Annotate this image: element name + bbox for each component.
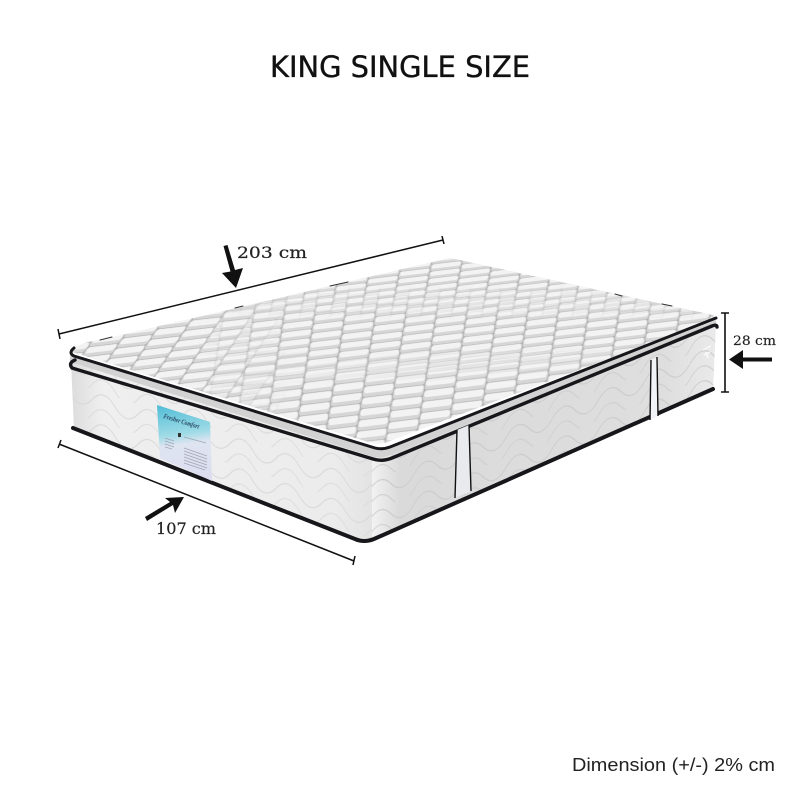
- back edge piping: [100, 282, 672, 340]
- arrow: length: [222, 245, 243, 288]
- dimension: length line: [58, 236, 444, 339]
- lower piping: [71, 325, 717, 460]
- label brand text: Fresher Comfort: [162, 412, 201, 431]
- bottom piping: [73, 389, 713, 541]
- height label: 28 cm: [733, 334, 776, 349]
- upper piping: [71, 318, 716, 449]
- width label: 107 cm: [156, 520, 216, 538]
- right side panel: [372, 325, 716, 541]
- front side panel: [71, 362, 378, 541]
- pillow top band: [70, 320, 716, 458]
- mattress illustration: [50, 240, 730, 541]
- product label: [157, 405, 212, 481]
- arrow: height: [729, 350, 772, 369]
- dimension: height line: [721, 313, 729, 392]
- quilted top surface: [72, 258, 714, 444]
- title: KING SINGLE SIZE: [270, 50, 530, 84]
- length label: 203 cm: [237, 243, 307, 262]
- handle strap right: [650, 357, 658, 420]
- footnote: Dimension (+/-) 2% cm: [572, 755, 775, 775]
- label icon: [178, 433, 181, 437]
- corner logo: [703, 346, 711, 358]
- dimension: width line: [58, 440, 355, 565]
- handle strap left: [455, 425, 471, 498]
- label fine print: [165, 437, 207, 470]
- arrow: width: [145, 497, 184, 521]
